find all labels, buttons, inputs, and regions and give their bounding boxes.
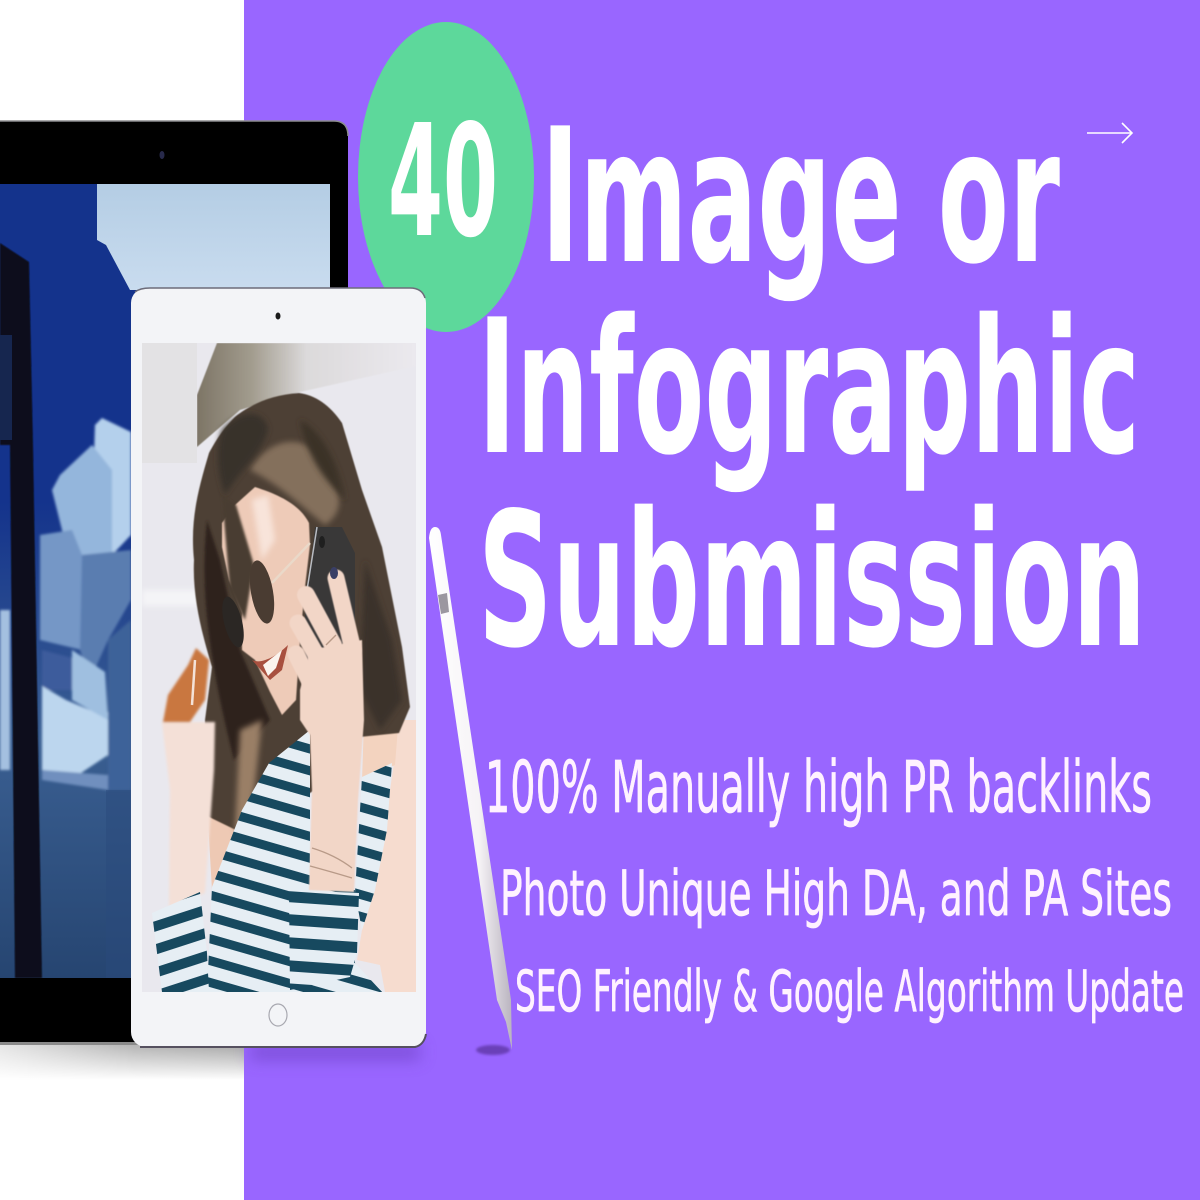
striped pocket fold [289,890,359,990]
smile [252,645,288,680]
sunglasses [218,543,310,649]
laptop camera [160,151,164,159]
shoulder skin [362,732,398,777]
green circle badge [358,22,534,332]
pencil shadow [476,1045,510,1055]
striped shirt right panel [355,763,392,930]
chest skin [208,818,234,888]
tablet screen photo: woman on phone [142,343,416,992]
laptop screen photo: building and sky [0,184,330,978]
woman's raised left arm [162,722,215,907]
hair strand over face [222,495,254,620]
orange fingers [163,648,209,722]
dark building column [0,243,42,978]
feature list [485,746,1184,1025]
device shadows [0,1044,420,1080]
striped shirt body [207,730,382,992]
striped shirt hem right [378,988,382,992]
badge number 40: 40 [388,91,498,272]
striped sleeve [152,892,209,992]
heading: Image or Infographic Submission [478,88,1146,689]
woman's hand and arm on phone [296,567,364,892]
tablet home button [269,1004,287,1026]
tablet device [131,288,426,1047]
purple background panel [244,0,1200,1200]
laptop tablet device [0,121,348,1045]
hair [193,393,410,833]
phone [305,527,355,648]
arrow icon [1087,123,1132,143]
pink top at right [357,720,416,992]
stylus pencil [429,527,512,1050]
face [222,487,310,715]
tablet camera [276,312,280,320]
